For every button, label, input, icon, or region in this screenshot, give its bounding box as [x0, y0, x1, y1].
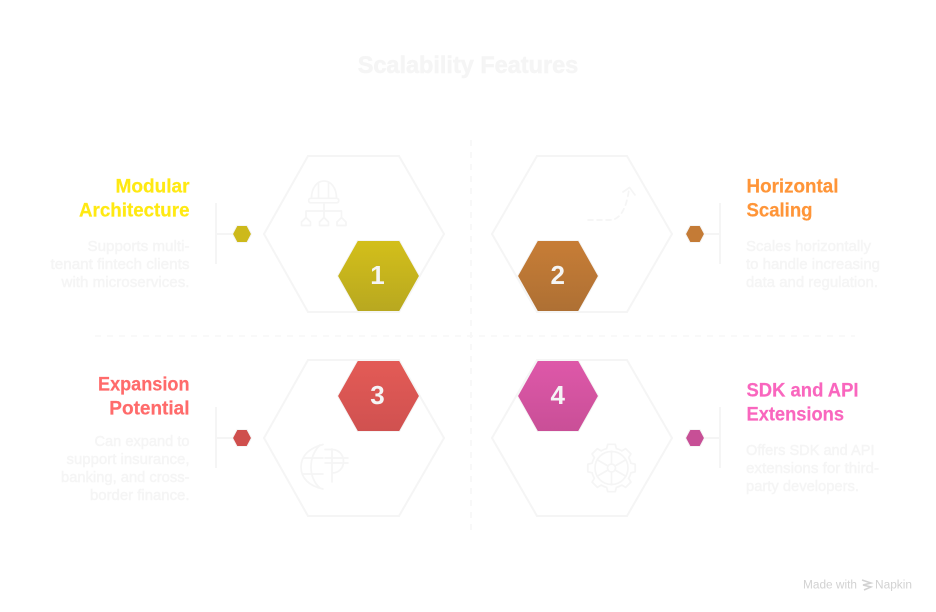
panel: horizontal scaling — [492, 156, 880, 312]
footer: made with napkin: Made with — [803, 580, 857, 592]
number badge 2 — [518, 240, 598, 312]
panel: expansion potential — [61, 360, 444, 516]
heading 3: Expansion — [98, 375, 190, 396]
number badge 1: 1 — [370, 260, 385, 290]
hexagon outline 4 — [492, 360, 672, 516]
icon: gear wheel — [587, 444, 636, 492]
icon: helmet and network — [302, 181, 346, 226]
panel: modular architecture — [50, 156, 444, 312]
heading 1: Architecture — [79, 201, 190, 222]
connector 3 — [216, 407, 233, 468]
connector 4 — [704, 407, 720, 468]
connector 1 — [216, 203, 233, 264]
number badge 3 — [338, 360, 420, 432]
title: Scalability Features — [358, 52, 578, 79]
icon: napkin logo — [862, 580, 871, 590]
heading 3: Potential — [109, 399, 190, 420]
heading 4: Extensions — [746, 405, 844, 426]
description 3: support insurance, — [66, 451, 190, 468]
description 3: Can expand to — [94, 433, 190, 450]
hexagon outline 3 — [264, 360, 444, 516]
marker hexagon 1 — [232, 226, 252, 242]
description 4: party developers. — [746, 478, 859, 495]
footer: made with napkin: Napkin — [875, 580, 912, 592]
marker hexagon 3 — [232, 430, 252, 446]
description 3: banking, and cross- — [61, 469, 190, 486]
description 4: extensions for third- — [746, 460, 879, 477]
description 3: border finance. — [90, 487, 190, 504]
number badge 4 — [518, 360, 598, 432]
footer: made with napkin — [803, 580, 912, 592]
description 4: Offers SDK and API — [746, 442, 874, 459]
description 1: tenant fintech clients — [50, 256, 190, 273]
number badge 2: 2 — [550, 260, 565, 290]
panel: sdk and api extensions — [492, 360, 879, 516]
hexagon outline 2 — [492, 156, 672, 312]
connector 2 — [704, 203, 720, 264]
number badge 1 — [338, 240, 420, 312]
marker hexagon 4 — [686, 430, 704, 446]
heading 4: SDK and API — [746, 381, 858, 402]
number badge 4: 4 — [550, 380, 565, 410]
description 2: data and regulation. — [746, 274, 878, 291]
description 1: Supports multi- — [88, 238, 190, 255]
number badge 3: 3 — [370, 380, 385, 410]
hexagon outline 1 — [264, 156, 444, 312]
marker hexagon 2 — [686, 226, 704, 242]
icon: globe and currency — [301, 444, 348, 489]
heading 2: Scaling — [746, 201, 812, 222]
heading 2: Horizontal — [746, 177, 838, 198]
description 2: to handle increasing — [746, 256, 880, 273]
icon: dashed rising arrow — [588, 188, 635, 220]
description 1: with microservices. — [60, 274, 190, 291]
heading 1: Modular — [116, 177, 190, 198]
description 2: Scales horizontally — [746, 238, 871, 255]
